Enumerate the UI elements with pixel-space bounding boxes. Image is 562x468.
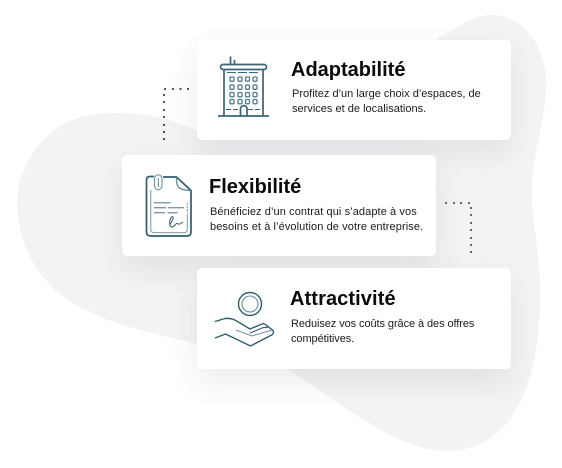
- text: Bénéficiez d’un contrat qui s’adapte à vos: [210, 206, 417, 218]
- text: [292, 88, 481, 114]
- connector: top left: [163, 88, 189, 140]
- heading: Attractivité: [290, 288, 396, 310]
- heading: Flexibilité: [209, 176, 301, 198]
- icon: contract document: [146, 174, 192, 237]
- text: [210, 206, 423, 232]
- panel: Flexibilité: [122, 155, 436, 256]
- panel: Adaptabilité: [197, 40, 511, 140]
- text: compétitives.: [291, 332, 354, 344]
- text: [291, 318, 474, 344]
- text: services et de localisations.: [292, 102, 426, 114]
- panel: Attractivité: [197, 268, 511, 369]
- text: Reduisez vos coûts grâce à des offres: [291, 318, 474, 330]
- icon: building: [218, 56, 269, 117]
- icon: hand holding coin: [214, 292, 274, 347]
- text: besoins et à l’évolution de votre entreprise.: [210, 220, 423, 232]
- connector: right: [445, 202, 472, 253]
- text: Profitez d’un large choix d’espaces, de: [292, 88, 481, 100]
- heading: Adaptabilité: [291, 59, 405, 81]
